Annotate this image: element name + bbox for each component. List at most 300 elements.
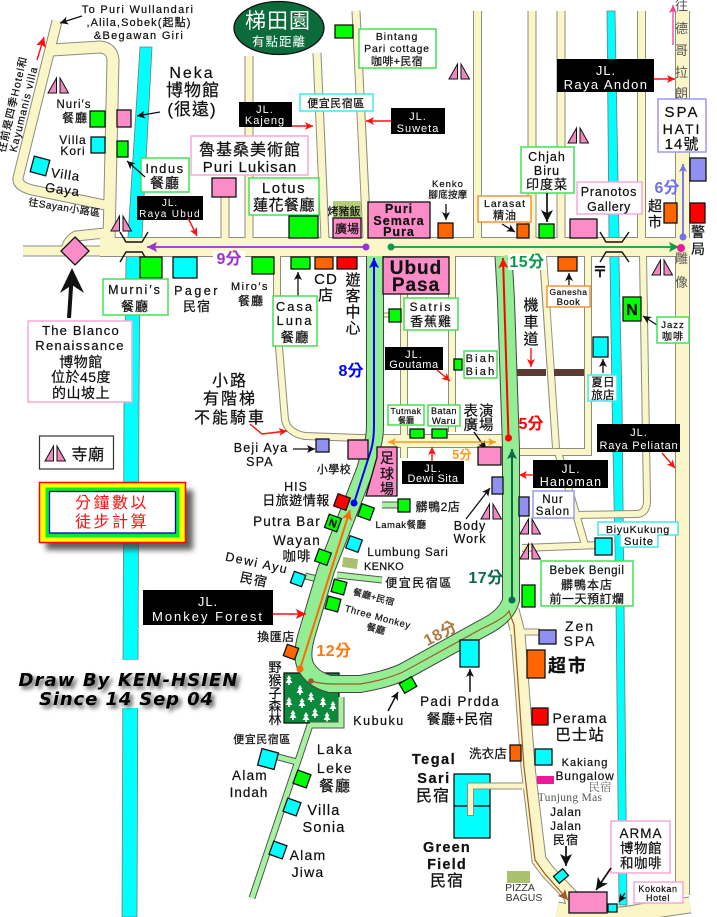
- label: BiyuKukung: Suite: [624, 536, 654, 548]
- label: Larasat: Larasat: [484, 198, 526, 210]
- west loop: Nuri's, Villa Kori: Villa: [50, 165, 81, 184]
- label: steps path: [194, 372, 287, 434]
- label: JL Kajeng: Kajeng: [245, 115, 285, 127]
- label: Three Monkey: [325, 596, 412, 637]
- label: Bintang: [335, 25, 436, 68]
- label: Green Field: [423, 806, 490, 890]
- bridges: [120, 232, 629, 262]
- west loop: Nuri's, Villa Kori: Kori: [60, 144, 86, 158]
- label: motorcycle lane: [523, 297, 539, 367]
- label: Pranotos: [570, 182, 642, 238]
- route: blue 8 min: 8分: [339, 362, 363, 380]
- label: motorcycle lane: 車: [523, 314, 539, 331]
- label: Beji Aya SPA: SPA: [246, 455, 274, 469]
- label: monkey forest vertical: 野: [268, 660, 282, 675]
- label: to Puri Wullandari: &Begawan Giri: [94, 30, 184, 42]
- label: Laka Leke: Leke: [317, 760, 353, 776]
- buildings and labels south of main road: Murni's, Pager, Miro's: 餐廳: [121, 299, 149, 314]
- label: to Puri Wullandari: ,Alila,Sobek(起點): [86, 16, 192, 29]
- label: JL Kajeng: [239, 102, 313, 127]
- label: JL Monkey Forest: Monkey Forest: [152, 609, 264, 624]
- label: KENKO: [342, 557, 404, 573]
- credit: Since 14 Sep 04: [42, 692, 216, 713]
- label: Batan Waru: Waru: [432, 416, 456, 427]
- label: CD shop: [314, 257, 338, 304]
- label: Alam Indah: Indah: [230, 785, 268, 800]
- label: monkey forest vertical: [268, 660, 282, 727]
- label: SPA HATI: 14號: [665, 136, 699, 153]
- label: Casa Luna: [273, 257, 317, 346]
- route: brown 18 min: 18分: [421, 617, 460, 650]
- vertical label: to Tegalalang: 拉: [675, 65, 689, 80]
- label: Green Field: 民宿: [430, 872, 464, 890]
- west loop: Nuri's, Villa Kori: 餐廳: [62, 110, 88, 125]
- vertical label: to Tegalalang: 德: [675, 21, 689, 36]
- label: supermarket: 超市: [548, 655, 588, 676]
- vertical label: to Tegalalang: 朗: [675, 86, 689, 101]
- label: Wayan: 咖啡: [282, 549, 312, 564]
- side roads near the forest: [252, 505, 398, 898]
- vertical label: to Tegalalang: [673, 0, 689, 101]
- label: police / supermarket: [648, 198, 705, 257]
- label: Puri Semara Pura: Puri: [385, 202, 413, 216]
- label: Blanco Renaissance: [28, 321, 132, 402]
- label: SPA HATI: SPA: [665, 104, 699, 121]
- title ellipse: 有點距離: [252, 34, 306, 49]
- label: HIS: HIS: [284, 480, 308, 494]
- label: Kokokan: Kokokan: [638, 884, 678, 894]
- label: Satris: [389, 298, 458, 330]
- label: Casa Luna: 餐廳: [280, 329, 310, 345]
- label: Padi Prdda: 餐廳+民宿: [427, 711, 493, 727]
- label: Kakiang Bungalow: [535, 749, 615, 783]
- soccer field: [366, 447, 397, 497]
- label: Perama: Perama: [552, 710, 608, 726]
- credit: Draw By KEN-HSIEN: [22, 673, 240, 694]
- label: cheap lodging area: [300, 94, 373, 111]
- label: Alam Indah: [230, 749, 278, 800]
- label: Tegal Sari: 民宿: [416, 787, 450, 805]
- label: JL Goutama: JL.: [405, 349, 423, 361]
- label: Bintang: 咖啡+民宿: [371, 54, 423, 68]
- label: Lamak: Lamak餐廳: [375, 519, 427, 531]
- label: Indus: Indus: [145, 161, 185, 176]
- label: Indus: 餐廳: [150, 175, 180, 191]
- walking route band: [303, 256, 511, 684]
- label: monkey forest vertical: 森: [268, 699, 282, 714]
- label: to Puri Wullandari: [60, 4, 194, 42]
- label: Jalan Jalan: Jalan: [550, 807, 582, 819]
- label: Putra Bar: N: [327, 517, 338, 531]
- west loop: Nuri's, Villa Kori: Gaya: [44, 180, 81, 199]
- label: Alam Indah: Alam: [232, 768, 268, 783]
- label: JL Monkey Forest: JL.: [198, 594, 218, 609]
- west loop: Nuri's, Villa Kori: Villa: [59, 133, 87, 147]
- label: Satris: 香蕉雞: [410, 314, 452, 329]
- label: Pranotos: Pranotos: [581, 185, 637, 199]
- label: ARMA: ARMA: [619, 826, 663, 841]
- buildings and labels south of main road: Murni's, Pager, Miro's: 餐廳: [238, 293, 264, 308]
- label: monkey forest vertical: 林: [268, 712, 282, 727]
- label: Bebek Bengil branch 2: [398, 499, 460, 514]
- label: HIS: [262, 480, 350, 510]
- label: tourist center: 遊: [345, 272, 361, 289]
- label: laundry: [469, 745, 521, 761]
- soccer field: 球: [380, 466, 394, 482]
- legend: temple: 寺廟: [71, 446, 105, 464]
- label: CD shop: CD: [314, 271, 338, 288]
- river: west: [122, 47, 152, 917]
- label: JL Raya Andon: JL.: [596, 63, 616, 78]
- label: Zen SPA: SPA: [564, 633, 596, 649]
- icon: post office: 〒: [592, 264, 608, 281]
- label: Kenko foot massage: [428, 179, 468, 238]
- label: JL Dewi Sita: JL.: [424, 463, 442, 475]
- label: BBQ pork plaza: 烤豬飯: [328, 204, 360, 218]
- route: brown 18 min: [308, 611, 568, 900]
- label: JL Monkey Forest: [143, 590, 306, 625]
- label: tourist center: 客: [345, 288, 361, 305]
- label: Body Work: [454, 477, 503, 546]
- label: Neka museum: (很遠): [167, 100, 217, 119]
- label: monkey forest vertical: 猴: [268, 673, 282, 688]
- label: Kubuku: [353, 677, 417, 728]
- label: Biah Biah: Biah: [466, 353, 496, 365]
- main-road purple route 9 min: 9分: [217, 250, 241, 268]
- label: Wayan: Wayan: [273, 533, 321, 548]
- label: Ubud Pasar: Ubud: [390, 258, 442, 279]
- label: motorcycle lane: 機: [523, 297, 539, 314]
- legend: temple: [40, 436, 114, 469]
- label: performance plaza: 表演: [464, 403, 494, 420]
- label: Bebek Bengil: [522, 561, 633, 607]
- label: Putra Bar: [253, 514, 342, 532]
- label: police / supermarket: 超: [648, 198, 662, 214]
- label: Blanco Renaissance: Renaissance: [35, 338, 125, 353]
- label: Perama: 巴士站: [555, 726, 605, 744]
- label: Bebek Bengil: 髒鴨本店: [561, 578, 613, 592]
- route: dark green 17 min: 17分: [468, 569, 504, 587]
- orange cross-route 5 min: [388, 442, 496, 462]
- label: Tutmak: [388, 405, 424, 438]
- label: Kakiang Bungalow: Bungalow: [555, 769, 615, 783]
- label: Blanco Renaissance: 博物館: [59, 354, 103, 370]
- label: steps path: 不能騎車: [194, 409, 266, 427]
- label: Biah Biah: [454, 351, 497, 378]
- label: Alam Jiwa: Alam: [290, 847, 326, 863]
- label: Larasat: 精油: [493, 208, 517, 222]
- soccer field: 足: [380, 450, 394, 466]
- callout: walking times note: 分鐘數以: [75, 494, 149, 512]
- label: Beji Aya SPA: Beji Aya: [234, 441, 288, 455]
- label: Tegal Sari: Sari: [417, 771, 451, 787]
- label: cheap lodging area (Monkey Forest): 便宜民宿區: [385, 575, 453, 590]
- label: JL Dewi Sita: Dewi Sita: [408, 473, 459, 485]
- label: Four Seasons rotated: [0, 37, 44, 154]
- label: JL Goutama: Goutama: [389, 359, 439, 371]
- buildings and labels south of main road: Murni's, Pager, Miro's: Miro′s: [231, 281, 269, 293]
- label: Bintang: Pari cottage: [364, 43, 430, 55]
- label: Chjah Biru: 印度菜: [526, 177, 568, 192]
- label: steps path: 小路: [212, 372, 248, 390]
- label: to Puri Wullandari: To Puri Wullandari: [82, 4, 194, 16]
- label: CD shop: 店: [318, 287, 334, 304]
- label: Four Seasons rotated: Kayumanis villa: [8, 65, 41, 153]
- label: supermarket: [527, 650, 588, 678]
- label: Zen SPA: [539, 618, 596, 649]
- label: ARMA: 博物館: [620, 840, 662, 856]
- label: police / supermarket: 警: [691, 224, 705, 240]
- label: Sayan road: 往Sayan小路區: [28, 195, 102, 220]
- label: ARMA: [569, 821, 670, 913]
- label: Puri Semara Pura: Semara: [373, 214, 425, 228]
- callout: walking times note: [40, 482, 193, 550]
- label: JL Hanoman: [519, 460, 608, 489]
- label: Jazz cafe: [623, 297, 689, 343]
- label: Batan Waru: [428, 405, 460, 438]
- label: Villa Sonia: [283, 798, 346, 836]
- label: Bebek Bengil branch 2: 髒鴨2店: [416, 500, 460, 514]
- label: Ganesha Book: [547, 257, 590, 308]
- label: Chjah Biru: [521, 147, 574, 238]
- label: Laka Leke: [293, 741, 353, 795]
- label: steps path: 有階梯: [203, 390, 257, 408]
- label: police / supermarket: 市: [648, 214, 662, 230]
- violet route 6 min: [655, 164, 686, 252]
- route: orange 12 min: 12分: [316, 642, 352, 660]
- label: Beji Aya SPA: [234, 439, 329, 469]
- label: performance plaza: 廣場: [464, 416, 494, 434]
- buildings and labels south of main road: Murni's, Pager, Miro's: 民宿: [183, 299, 211, 314]
- label: JL Raya Peliatan: Raya Peliatan: [600, 440, 678, 452]
- label: restaurant + lodging: 餐廳+民宿: [352, 586, 396, 607]
- label: Jazz cafe: 咖啡: [662, 331, 684, 343]
- label: Puri Semara Pura: Pura: [383, 225, 415, 239]
- label: police / supermarket: 局: [691, 241, 705, 257]
- label: Ganesha Book: Ganesha: [550, 287, 588, 297]
- label: Padi Prdda: [420, 640, 500, 727]
- label: SPA HATI: [658, 99, 706, 181]
- west loop: Nuri's, Villa Kori: Nuri′s: [56, 99, 92, 111]
- label: BiyuKukung: BiyuKukung: [606, 524, 670, 536]
- label: Tegal Sari: Tegal: [412, 752, 456, 768]
- label: JL Suweta: JL.: [409, 111, 427, 123]
- label: Biah Biah: Biah: [466, 366, 496, 378]
- label: Casa Luna: Luna: [277, 313, 313, 328]
- west loop: Nuri's, Villa Kori: [30, 99, 131, 199]
- label: summer hotel: 旅店: [591, 388, 615, 402]
- label: Ubud Pasar: [383, 257, 449, 296]
- label: JL Raya Peliatan: JL.: [630, 427, 648, 439]
- label: restaurant + lodging: [331, 579, 396, 607]
- label: Green Field: Field: [427, 857, 467, 873]
- label: BiyuKukung: [595, 522, 678, 555]
- label: Ganesha Book: Book: [557, 297, 580, 308]
- label: Jalan Jalan: [550, 807, 582, 883]
- route: red 5 min: 5分: [519, 415, 543, 433]
- label: Dewi Ayu: Dewi Ayu: [224, 550, 290, 577]
- label: JL Raya Andon: [557, 59, 675, 92]
- label: Kenko foot massage: 腳底按摩: [428, 189, 468, 201]
- label: Three Monkey: 餐廳: [365, 621, 387, 637]
- label: Putra Bar: Putra Bar: [253, 514, 321, 529]
- label: Body Work: Body: [454, 519, 486, 533]
- label: Wayan: [273, 533, 331, 565]
- vertical label: to Tegalalang: 哥: [675, 43, 689, 58]
- label: Perama: [532, 708, 608, 744]
- label: Padi Prdda: Padi Prdda: [420, 694, 500, 709]
- label: Three Monkey: Three Monkey: [343, 603, 412, 632]
- label: JL Raya Andon: Raya Andon: [564, 77, 648, 92]
- main-road purple route 9 min: [147, 244, 370, 268]
- label: KENKO: KENKO: [364, 561, 404, 573]
- label: Tunjung Mas: 民宿: [588, 780, 612, 794]
- label: Neka museum: Neka: [169, 65, 215, 82]
- buildings and labels south of main road: Murni's, Pager, Miro's: Murni′s: [108, 283, 162, 297]
- route: orange 12 min: [296, 510, 352, 672]
- buildings and labels south of main road: Murni's, Pager, Miro's: [103, 257, 274, 315]
- buildings and labels south of main road: Murni's, Pager, Miro's: Pager: [174, 284, 220, 298]
- label: summer hotel: 夏日: [591, 376, 615, 389]
- label: Villa Sonia: Villa: [307, 803, 341, 819]
- label: JL Hanoman: Hanoman: [540, 475, 602, 489]
- label: Blanco Renaissance: 的山坡上: [52, 385, 110, 401]
- label: JL Raya Peliatan: [597, 424, 680, 468]
- motorcycle lane bar: [515, 369, 584, 376]
- label: Jazz cafe: N: [626, 302, 638, 319]
- label: Laka Leke: Laka: [317, 741, 353, 757]
- label: monkey forest vertical: 子: [268, 686, 282, 701]
- statue vertical label: [675, 251, 689, 290]
- label: JL Dewi Sita: [402, 447, 464, 485]
- label: BBQ pork plaza: 廣場: [335, 222, 359, 236]
- label: tourist center: 心: [345, 320, 361, 337]
- label: Neka museum: 博物館: [166, 81, 220, 100]
- monkey forest: [284, 673, 339, 723]
- credit: Since 14 Sep 04: [39, 689, 213, 710]
- arrow: to Blanco: [69, 272, 72, 318]
- label: ARMA: 和咖啡: [620, 856, 662, 871]
- label: Puri Lukisan: Puri Lukisan: [203, 159, 297, 176]
- label: Nur Salon: Salon: [536, 506, 570, 518]
- label: Indus: [127, 158, 189, 192]
- label: SPA HATI: HATI: [663, 121, 701, 137]
- label: cheap lodging south: 便宜民宿區: [233, 732, 291, 746]
- label: school: [317, 440, 368, 476]
- label: money exchange: 換匯店: [257, 630, 295, 644]
- callout: walking times note: 徒步計算: [75, 513, 149, 531]
- route: blue 8 min: [339, 258, 374, 506]
- diamond: Blanco: [61, 237, 89, 265]
- label: Jalan Jalan: 民宿: [553, 832, 579, 847]
- label: JL Suweta: [366, 108, 445, 135]
- label: JL Goutama: [385, 347, 450, 381]
- label: Tegal Sari: [412, 752, 490, 806]
- label: Tunjung Mas: Tunjung Mas: [538, 792, 602, 804]
- label: Green Field: Green: [423, 840, 471, 856]
- label: Batan Waru: Batan: [431, 406, 457, 416]
- title ellipse: 梯田園: [245, 10, 311, 33]
- temples: [48, 64, 672, 559]
- label: performance plaza: [464, 403, 501, 465]
- label: Dewi Ayu: [224, 550, 306, 590]
- label: Chjah Biru: Biru: [534, 164, 560, 178]
- label: Pizza Bagus: [505, 871, 542, 904]
- label: Pizza Bagus: BAGUS: [506, 892, 542, 904]
- label: Dewi Ayu: 民宿: [239, 569, 269, 590]
- label: money exchange: [257, 630, 299, 660]
- driveway into Tegal Sari: [470, 786, 524, 816]
- label: laundry: 洗衣店: [469, 746, 507, 761]
- label: Lumbung Sari: Lumbung Sari: [367, 547, 449, 559]
- label: JL Hanoman: JL.: [561, 462, 581, 476]
- label: Satris: Satris: [410, 300, 452, 314]
- label: Pranotos: Gallery: [587, 200, 631, 214]
- label: Chjah Biru: Chjah: [528, 150, 566, 164]
- label: Bebek Bengil: Bebek Bengil: [550, 565, 624, 577]
- label: motorcycle lane: 道: [523, 331, 539, 348]
- label: summer hotel: [588, 337, 617, 402]
- credit: [18, 660, 240, 713]
- label: Body Work: Work: [454, 532, 486, 546]
- label: Neka museum: [137, 65, 220, 119]
- label: cheap lodging area: 便宜民宿區: [307, 96, 365, 110]
- statue vertical label: 像: [675, 275, 689, 290]
- label: Blanco Renaissance: 位於45度: [51, 369, 111, 385]
- label: Alam Jiwa: [269, 841, 326, 880]
- label: Villa Sonia: Sonia: [302, 820, 346, 836]
- label: Kubuku: Kubuku: [353, 714, 405, 728]
- label: Bintang: Bintang: [376, 31, 418, 43]
- main-road green route 15 min: [388, 244, 679, 271]
- label: Tunjung Mas: [537, 776, 612, 804]
- label: JL Kajeng: JL.: [256, 104, 274, 116]
- label: Ubud Pasar: Pasa: [392, 275, 440, 296]
- label: Bebek Bengil: 前一天預訂爛: [549, 591, 625, 606]
- label: Laka Leke: 餐廳: [319, 777, 351, 795]
- label: HIS: 日旅遊情報: [262, 493, 330, 508]
- label: Blanco Renaissance: The Blanco: [42, 323, 120, 338]
- violet route 6 min: 6分: [655, 179, 679, 197]
- label: Kokokan: Hotel: [646, 893, 670, 903]
- soccer field: 場: [380, 481, 394, 497]
- label: Puri Lukisan: 魯基桑美術館: [199, 141, 301, 159]
- arrowhead: Blanco: [60, 268, 84, 293]
- label: JL Raya Ubud: Raya Ubud: [139, 209, 201, 220]
- label: Nur Salon: [519, 491, 574, 518]
- label: JL Raya Ubud: [137, 196, 203, 236]
- label: Tutmak: Tutmak: [390, 406, 422, 416]
- label: Tutmak: 餐廳: [398, 415, 414, 425]
- label: Zen SPA: Zen: [565, 618, 595, 634]
- label: tourist center: 中: [345, 304, 361, 321]
- river: east: [607, 11, 627, 905]
- label: JL Suweta: Suweta: [397, 123, 439, 135]
- label: Jalan Jalan: Jalan: [550, 821, 582, 833]
- label: Kenko foot massage: Kenko: [432, 179, 464, 190]
- label: Larasat: [478, 196, 531, 238]
- route: red 5 min: [503, 258, 543, 442]
- label: Lumbung Sari: [346, 536, 449, 559]
- route: dark green 17 min: [468, 449, 516, 604]
- label: school: 小學校: [317, 462, 351, 476]
- credit: Draw By KEN-HSIEN: [18, 670, 238, 691]
- label: Lotus: Lotus: [262, 180, 306, 197]
- label: Nur Salon: Nur: [542, 494, 564, 506]
- label: Kakiang Bungalow: Kakiang: [562, 757, 608, 769]
- main-road green route 15 min: 15分: [509, 253, 545, 271]
- label: Lotus: 蓮花餐廳: [253, 196, 315, 214]
